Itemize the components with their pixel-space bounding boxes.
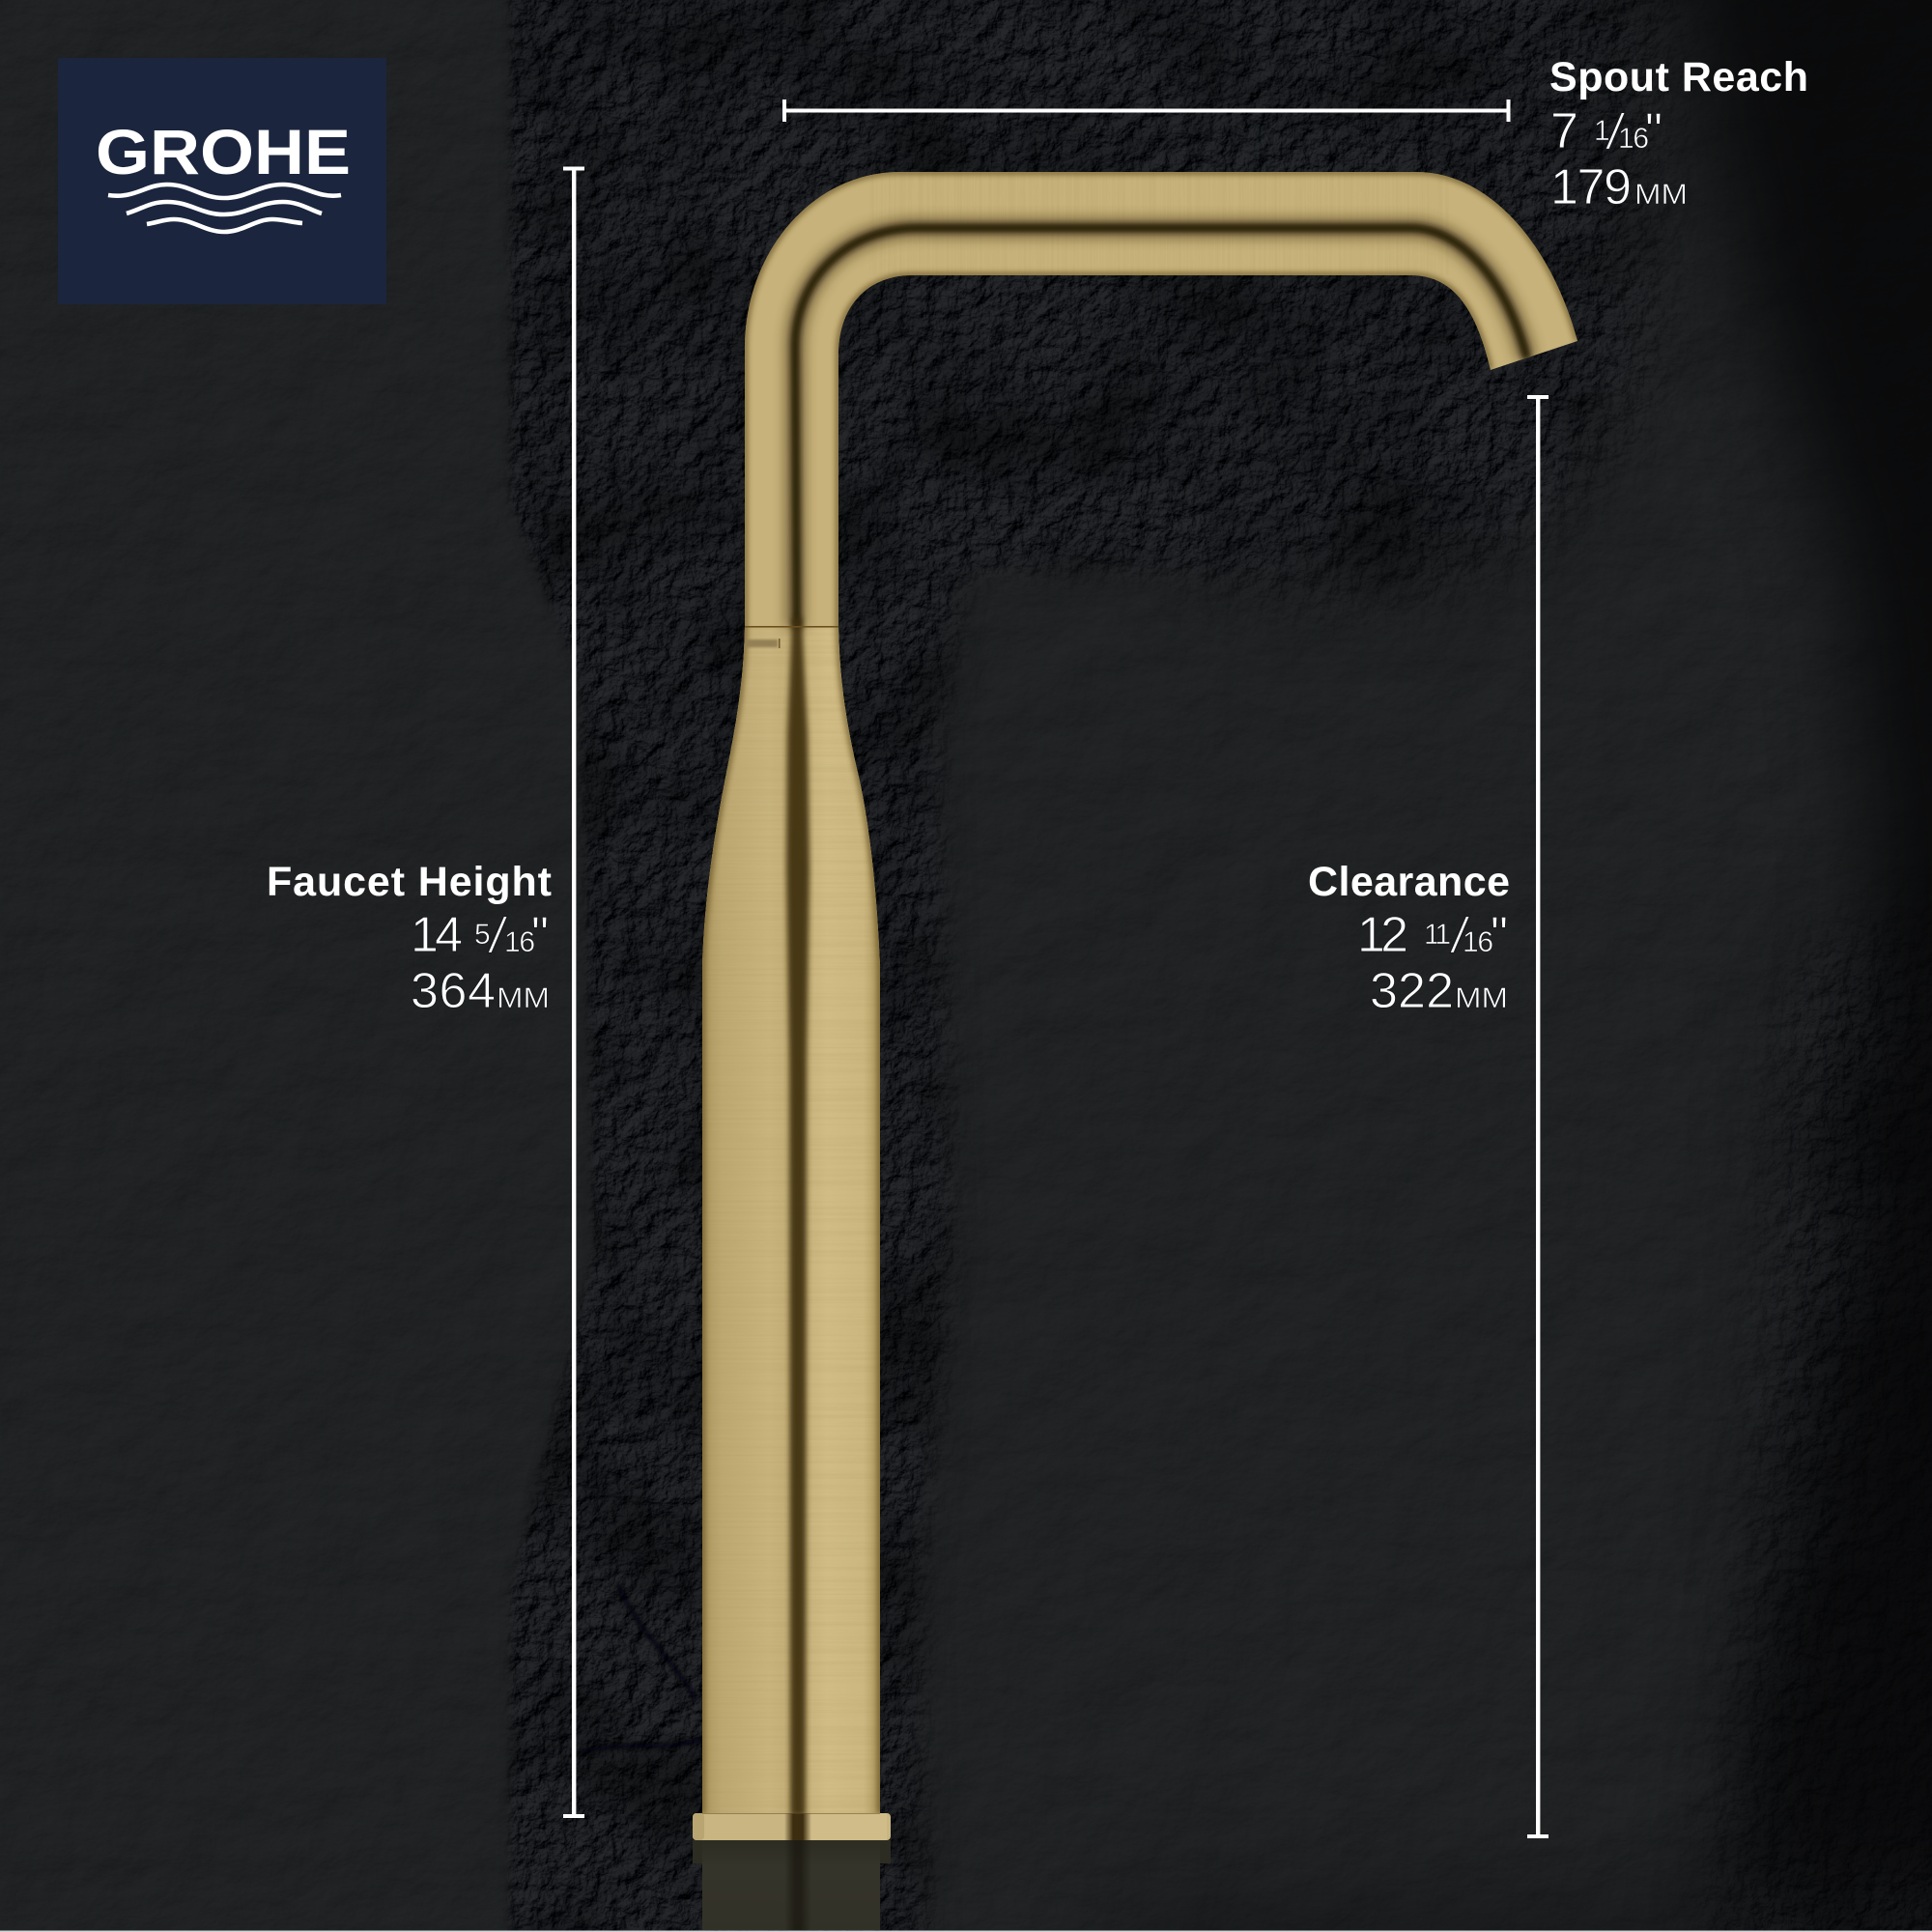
label: spout reach: 1 [1594, 115, 1610, 147]
label: spout reach: 16 [1618, 123, 1649, 155]
label: spout reach: Spout Reach [1549, 54, 1808, 100]
body groove [786, 618, 810, 1816]
label: faucet height: 5 [474, 919, 491, 951]
faucet base flange [693, 1812, 891, 1840]
edge shading [702, 172, 1577, 1813]
label: spout reach: / [1604, 104, 1627, 160]
label: clearance: / [1448, 908, 1471, 964]
faucet body and spout [676, 155, 1604, 1826]
label: spout reach: " [1645, 103, 1662, 159]
label: clearance: MM [1455, 982, 1508, 1014]
label: clearance: 11 [1424, 919, 1451, 951]
label: faucet height: 14 [411, 907, 463, 963]
dimension: faucet height line [563, 166, 584, 1818]
label: clearance [1308, 859, 1510, 1019]
faucet [676, 155, 1604, 1930]
label: clearance: 12 [1357, 907, 1408, 963]
label: spout reach [1549, 54, 1808, 215]
label: faucet height [267, 859, 552, 1019]
label: clearance: " [1491, 907, 1508, 963]
faucet reflection on surface [693, 1840, 891, 1930]
collar seam [739, 626, 845, 628]
dimension: spout reach line [782, 99, 1511, 122]
dimension: clearance line [1527, 395, 1548, 1838]
label: faucet height: " [531, 907, 549, 963]
label: clearance: 322 [1370, 963, 1454, 1019]
label: faucet height: Faucet Height [267, 859, 552, 905]
label: faucet height: / [486, 908, 509, 964]
logo waves [108, 185, 341, 232]
label: clearance: Clearance [1308, 859, 1510, 905]
label: spout reach: MM [1634, 179, 1688, 211]
central groove core [795, 228, 1527, 628]
label: faucet height: 364 [411, 963, 496, 1019]
logo wordmark: GROHE [96, 116, 351, 187]
logo: GROHE [58, 58, 386, 304]
label: faucet height: 16 [504, 926, 535, 958]
engraved mark [744, 639, 778, 647]
label: spout reach: 7 [1550, 103, 1578, 159]
label: faucet height: MM [497, 982, 550, 1014]
central groove soft shadow [795, 228, 1527, 628]
label: spout reach: 179 [1550, 159, 1632, 215]
label: clearance: 16 [1463, 926, 1493, 958]
